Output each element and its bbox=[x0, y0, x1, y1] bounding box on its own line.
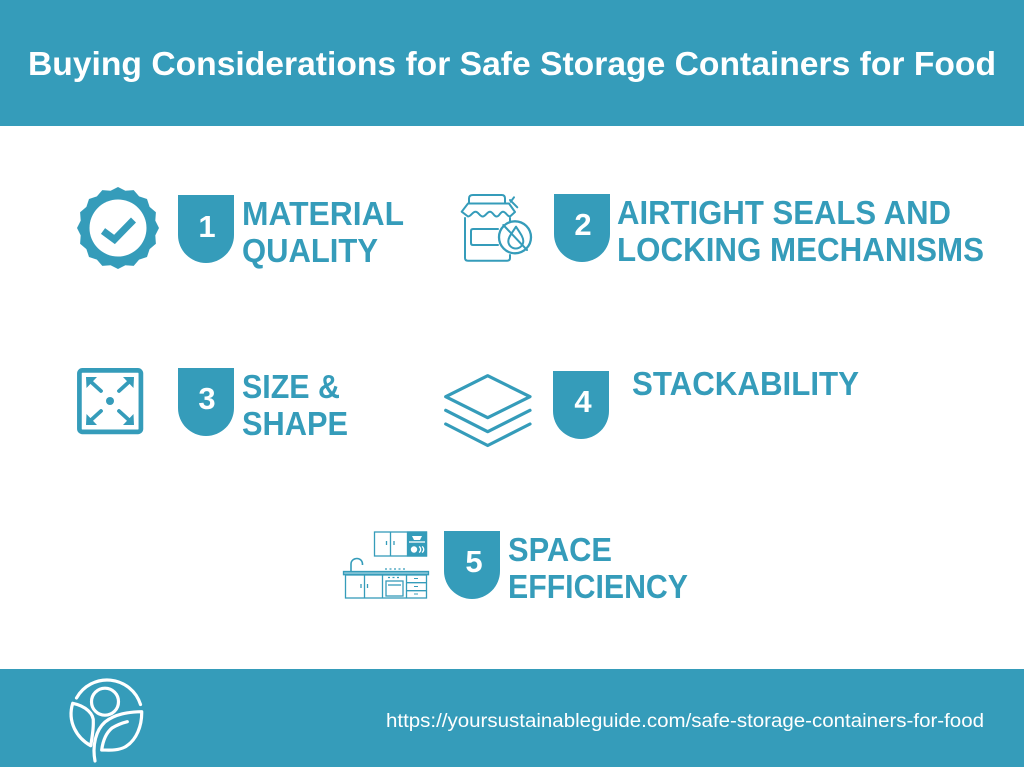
number shield 5: 5 bbox=[465, 544, 483, 579]
header band bbox=[0, 0, 1024, 126]
number shield 4 bbox=[553, 371, 609, 439]
heading: size and shape: SIZE & bbox=[242, 368, 340, 405]
logo: person and leaf bbox=[71, 680, 142, 761]
heading: airtight seals and locking mechanisms: AIRTIGHT SEALS AND bbox=[617, 194, 951, 231]
icon: sealed jar with no-water symbol bbox=[462, 195, 531, 261]
heading: size and shape bbox=[242, 368, 348, 442]
item 4: stackability bbox=[446, 365, 859, 446]
number shield 1 bbox=[178, 195, 234, 263]
number shield 1: 1 bbox=[198, 209, 216, 244]
item 3: size and shape bbox=[79, 368, 348, 442]
icon: badge with check mark bbox=[77, 187, 159, 269]
number shield 4: 4 bbox=[574, 384, 592, 419]
heading: material quality bbox=[242, 195, 404, 269]
icon: square with expanding arrows bbox=[79, 370, 141, 432]
item 2: airtight seals bbox=[462, 194, 984, 268]
number shield 3: 3 bbox=[198, 381, 216, 416]
icon: kitchen bbox=[344, 532, 428, 598]
heading: airtight seals and locking mechanisms: LOCKING MECHANISMS bbox=[617, 231, 984, 268]
title: Buying Considerations for Safe Storage Containers for Food bbox=[28, 45, 996, 82]
heading: airtight seals and locking mechanisms bbox=[617, 194, 984, 268]
heading: size and shape: SHAPE bbox=[242, 405, 348, 442]
number shield 5 bbox=[444, 531, 500, 599]
item 1: material quality bbox=[77, 187, 404, 269]
heading: material quality: QUALITY bbox=[242, 232, 378, 269]
heading: material quality: MATERIAL bbox=[242, 195, 404, 232]
number shield 2: 2 bbox=[574, 207, 592, 242]
heading: space efficiency: SPACE bbox=[508, 531, 612, 568]
number shield 3 bbox=[178, 368, 234, 436]
footer band bbox=[0, 669, 1024, 767]
number shield 2 bbox=[554, 194, 610, 262]
heading: space efficiency bbox=[508, 531, 688, 605]
heading: space efficiency: EFFICIENCY bbox=[508, 568, 688, 605]
icon: stacked layers bbox=[446, 376, 530, 446]
footer url: https://yoursustainableguide.com/safe-storage-containers-for-food bbox=[386, 711, 984, 732]
heading: stackability: STACKABILITY bbox=[632, 365, 859, 402]
item 5: space efficiency bbox=[344, 531, 688, 605]
